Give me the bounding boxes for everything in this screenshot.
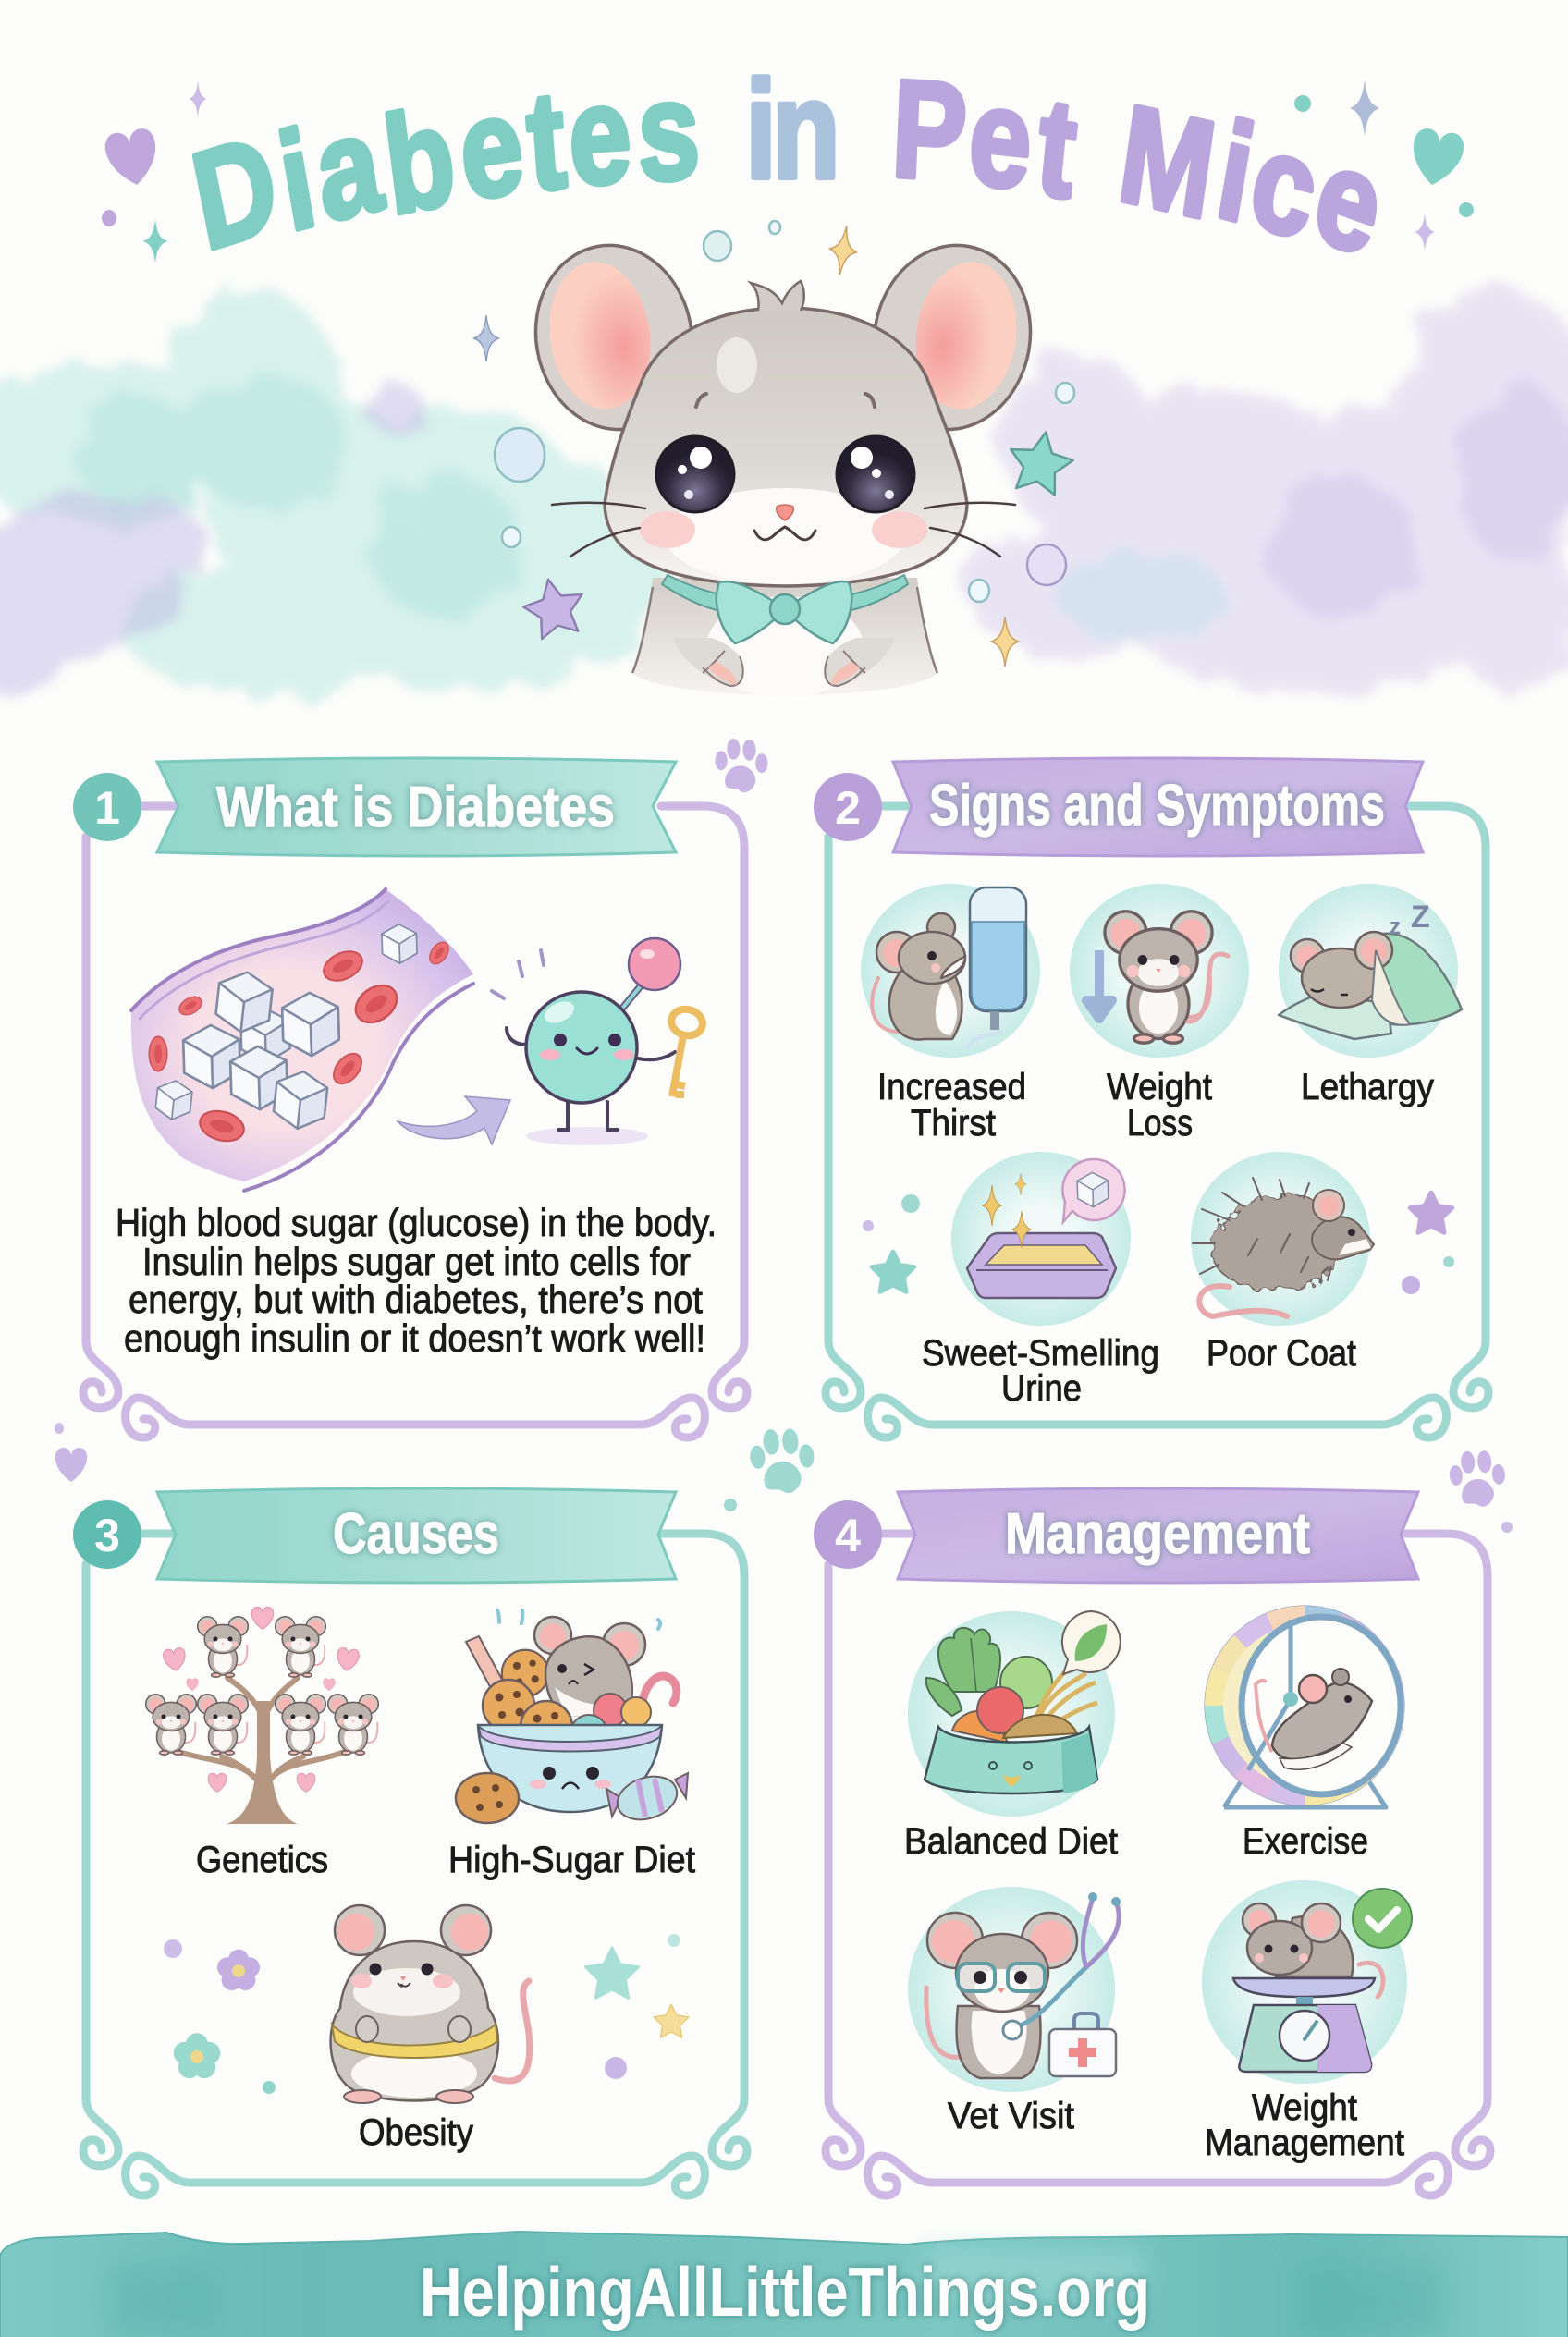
number badge: 4 <box>835 1510 861 1561</box>
number badge <box>73 1500 141 1569</box>
number badge <box>73 773 141 841</box>
banner: What is Diabetes <box>216 776 615 839</box>
icon: high-sugar diet bowl <box>456 1610 688 1827</box>
labels: Weight <box>1107 1067 1212 1107</box>
title decorations <box>102 80 1474 263</box>
icon: vet visit <box>908 1887 1121 2092</box>
icon: weight management scale <box>1202 1880 1412 2084</box>
decorations <box>863 1193 1454 1294</box>
collar and bow <box>662 575 908 617</box>
icon: obesity mouse <box>331 1905 530 2103</box>
labels: Balanced Diet <box>904 1821 1118 1862</box>
icon: lethargy <box>1279 884 1462 1058</box>
labels: Management <box>1205 2123 1404 2163</box>
labels: Thirst <box>911 1103 996 1144</box>
banner: Management <box>1005 1502 1310 1566</box>
labels: Weight <box>1252 2087 1357 2128</box>
illustration: insulin cell with key <box>492 938 705 1145</box>
website text: HelpingAllLittleThings.org <box>420 2253 1150 2331</box>
icon: lethargy: z <box>1390 914 1401 939</box>
labels: Urine <box>1001 1368 1082 1409</box>
banner: Causes <box>333 1502 499 1566</box>
banner <box>893 758 1423 856</box>
icon: sweet-smelling urine <box>951 1152 1131 1326</box>
panel: management <box>814 1488 1490 2196</box>
panel: causes <box>73 1488 747 2196</box>
whiskers <box>552 503 1015 557</box>
banner <box>157 758 676 856</box>
panel: what is diabetes <box>73 758 747 1438</box>
ears <box>521 233 1045 442</box>
labels: Poor Coat <box>1207 1333 1356 1374</box>
watercolor cloud background <box>0 287 1568 693</box>
body <box>632 578 937 698</box>
number badge: 1 <box>94 782 120 834</box>
hero mouse mascot <box>521 233 1045 698</box>
labels: Sweet-Smelling <box>922 1333 1159 1374</box>
banner: Signs and Symptoms <box>929 774 1385 838</box>
description text: High blood sugar (glucose) in the body. <box>116 1201 717 1244</box>
labels: Increased <box>877 1067 1026 1107</box>
icon: weight loss <box>1070 884 1249 1058</box>
labels: High-Sugar Diet <box>448 1840 695 1880</box>
number badge <box>814 773 882 841</box>
panel frame <box>826 806 1488 1438</box>
number badge <box>814 1500 882 1569</box>
labels <box>196 1840 695 2153</box>
icon: increased thirst <box>861 884 1040 1058</box>
hero floating bubbles and stars <box>474 221 1077 667</box>
title: Pet <box>889 50 1083 227</box>
arrow <box>398 1096 510 1144</box>
labels <box>904 1821 1404 2163</box>
decorations <box>164 1934 689 2094</box>
banner <box>898 1488 1418 1583</box>
icon: poor coat <box>1191 1152 1374 1326</box>
labels: Loss <box>1127 1103 1193 1144</box>
labels: Obesity <box>359 2112 473 2153</box>
head <box>605 308 967 586</box>
labels: Lethargy <box>1301 1067 1434 1107</box>
panel frame <box>83 1534 747 2196</box>
number badge: 2 <box>835 782 861 834</box>
title: in <box>745 52 840 207</box>
title: Mice <box>1111 75 1396 286</box>
labels: Genetics <box>196 1840 328 1880</box>
panel: signs and symptoms <box>814 758 1488 1438</box>
panel frame <box>826 1534 1490 2196</box>
icon: balanced diet <box>908 1611 1121 1817</box>
icon: lethargy: Z <box>1411 899 1430 935</box>
banner <box>157 1488 676 1583</box>
icon: exercise wheel <box>1176 1577 1433 1834</box>
title: Diabetes <box>181 52 702 279</box>
description text: Insulin helps sugar get into cells for <box>142 1240 691 1283</box>
background paws and dots <box>55 739 1513 1533</box>
number badge: 3 <box>94 1510 120 1561</box>
panel frame <box>83 806 747 1438</box>
labels: Vet Visit <box>948 2096 1074 2136</box>
footer banner <box>0 2232 1568 2337</box>
icon: genetics family tree <box>146 1607 378 1824</box>
cheeks, nose, mouth <box>640 511 695 548</box>
illustration: blood vessel with sugar cubes <box>131 889 473 1191</box>
labels <box>877 1067 1434 1409</box>
description text: enough insulin or it doesn’t work well! <box>124 1316 705 1360</box>
paws <box>673 638 744 686</box>
labels: Exercise <box>1243 1821 1368 1862</box>
description text <box>116 1201 717 1360</box>
description text: energy, but with diabetes, there’s not <box>129 1278 703 1321</box>
eyes <box>656 436 914 512</box>
